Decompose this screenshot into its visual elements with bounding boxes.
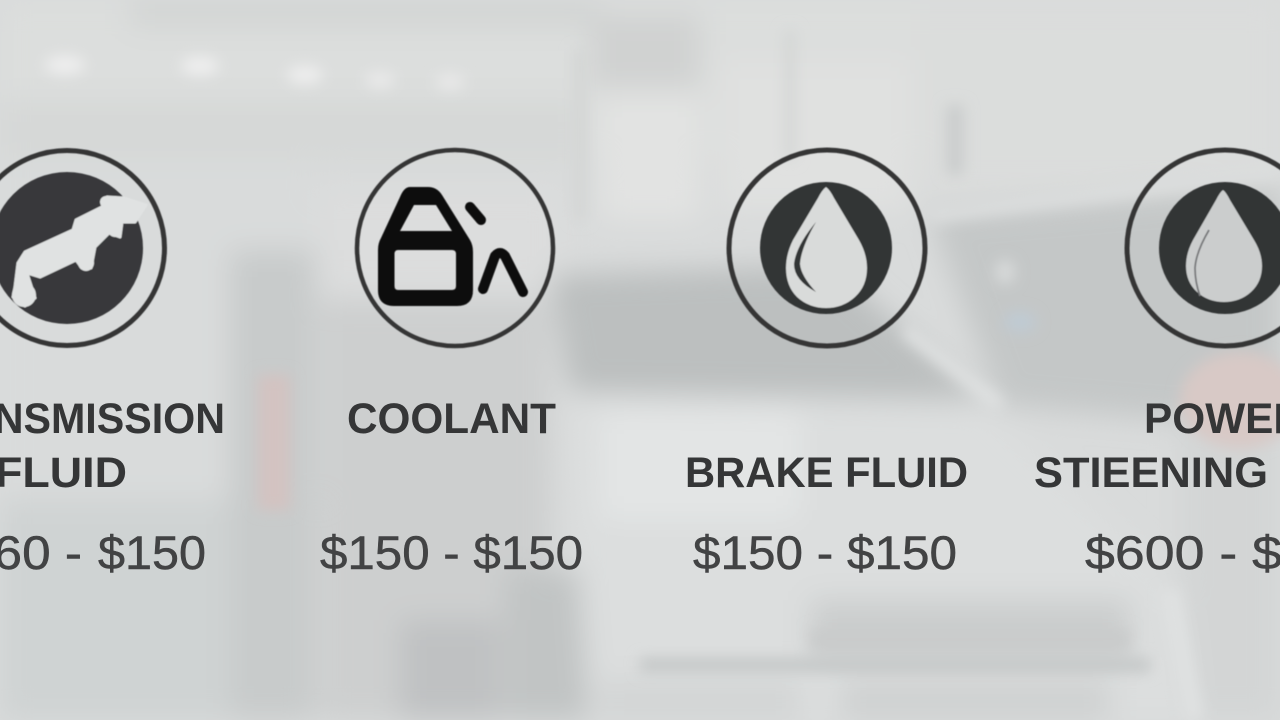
price: power steering fluid: $600 - $ xyxy=(1085,526,1280,579)
icon: brake fluid drop xyxy=(729,150,925,346)
label: power steering fluid: STIEENING xyxy=(1034,449,1268,497)
price: coolant: $150 - $150 xyxy=(320,526,583,579)
item: brake fluid xyxy=(685,150,968,579)
item: power steering fluid xyxy=(1034,150,1280,579)
label: transmission fluid xyxy=(0,395,225,497)
icon: coolant jug xyxy=(357,150,553,346)
label: power steering fluid xyxy=(1034,395,1280,497)
item: transmission fluid xyxy=(0,150,225,579)
label: brake fluid: BRAKE FLUID xyxy=(685,449,968,497)
item: coolant xyxy=(320,150,583,579)
label: coolant: COOLANT xyxy=(347,395,556,443)
icon: power steering fluid drop xyxy=(1127,150,1280,346)
icon: transmission fluid xyxy=(0,150,164,346)
price: transmission fluid xyxy=(0,526,206,579)
price: transmission fluid: $150 xyxy=(98,526,206,579)
price: brake fluid: $150 - $150 xyxy=(693,526,957,579)
